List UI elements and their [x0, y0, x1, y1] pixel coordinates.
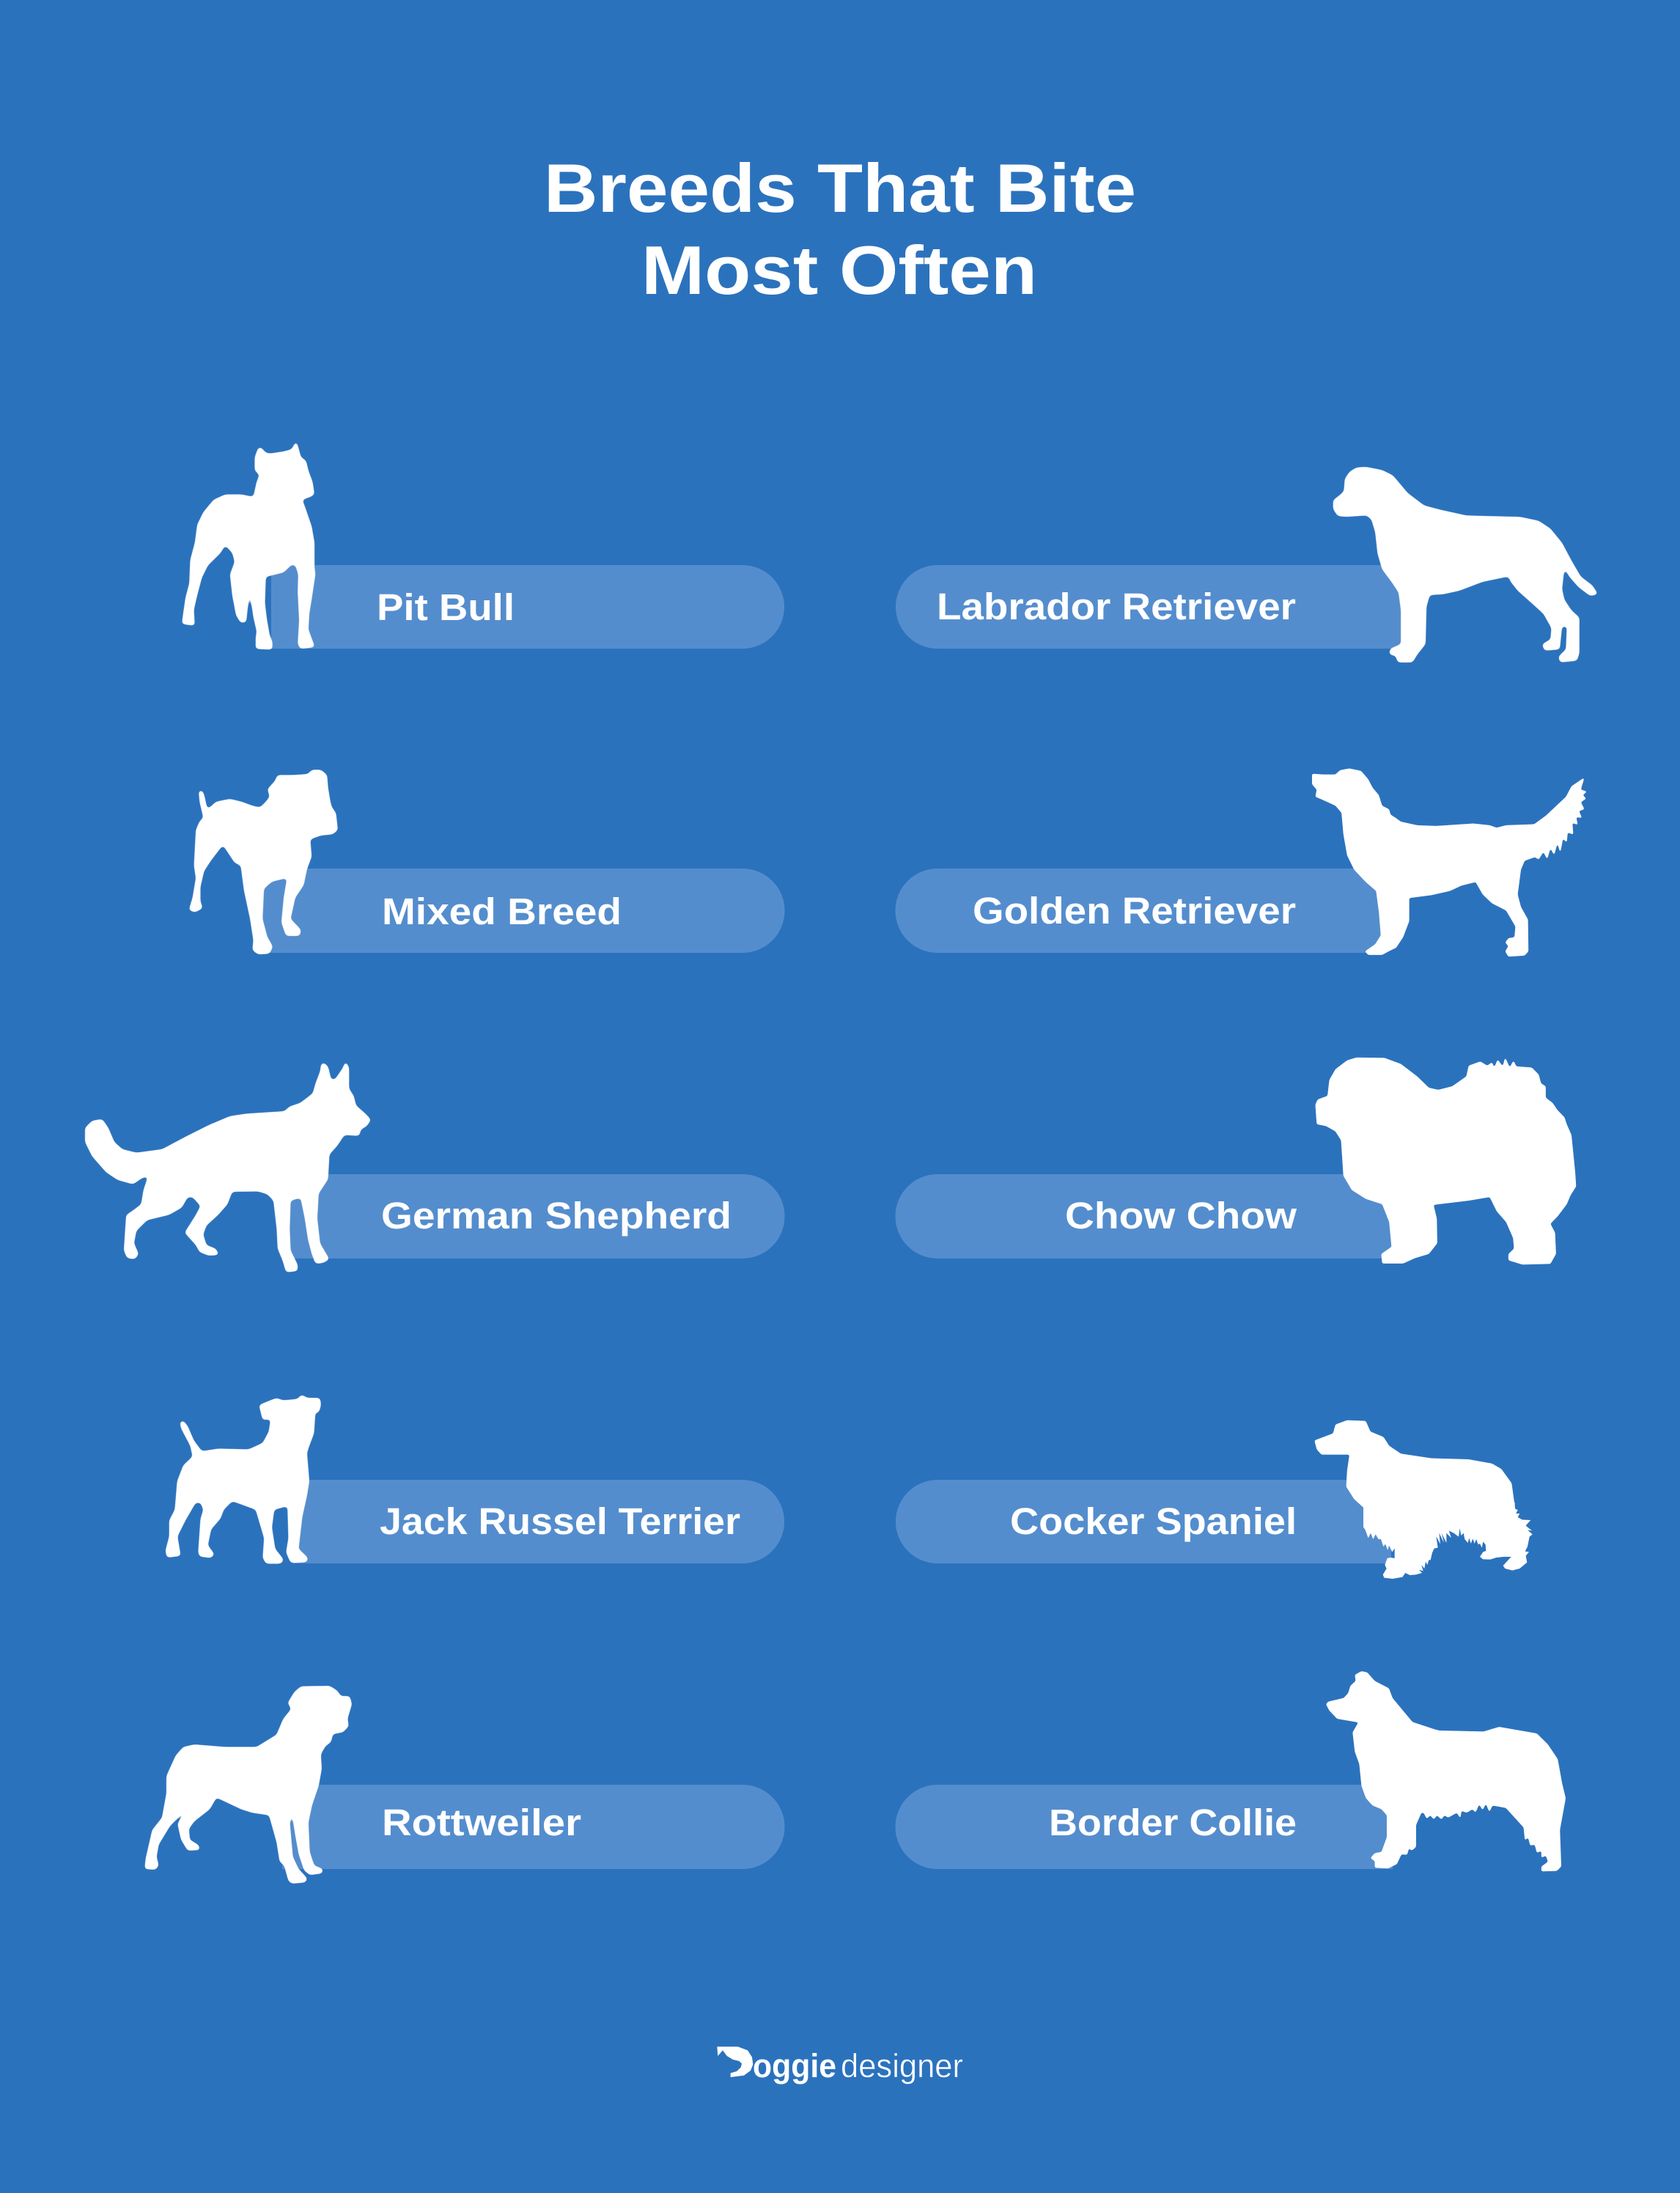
icon: logo dog-head D: [717, 2046, 753, 2077]
icon: german shepherd silhouette: [85, 1061, 371, 1272]
panel: Golden Retriever: [895, 768, 1588, 957]
label: Golden Retriever: Golden Retriever: [973, 890, 1296, 932]
icon: jack russel terrier silhouette: [166, 1394, 321, 1563]
label: Cocker Spaniel: Cocker Spaniel: [1010, 1500, 1297, 1542]
label: Border Collie: Border Collie: [1049, 1802, 1297, 1843]
icon: chow chow silhouette: [1315, 1057, 1576, 1264]
label: Jack Russel Terrier: Jack Russel Terrier: [380, 1500, 740, 1542]
label: Chow Chow: Chow Chow: [1065, 1195, 1297, 1236]
label: German Shepherd: German Shepherd: [381, 1195, 732, 1236]
panel: Border Collie: [895, 1671, 1566, 1871]
logo: Doggie Designer: [717, 2046, 963, 2085]
logo wordmark bold: oggie: [753, 2047, 836, 2085]
title: Breeds That Bite: [544, 150, 1136, 226]
title: Most Often: [641, 232, 1037, 309]
panel: Cocker Spaniel: [896, 1420, 1533, 1579]
panel: Jack Russel Terrier: [166, 1394, 784, 1563]
icon: golden retriever silhouette: [1312, 768, 1588, 957]
icon: mixed breed silhouette: [189, 770, 338, 954]
icon: border collie silhouette: [1326, 1671, 1566, 1871]
panel: Mixed Breed: [189, 770, 784, 954]
label: Mixed Breed: Mixed Breed: [382, 891, 622, 932]
label: Pit Bull: Pit Bull: [377, 586, 515, 628]
panel: Rottweiler: [144, 1686, 784, 1884]
panel: Pit Bull: [182, 440, 784, 649]
panel: Chow Chow: [895, 1057, 1576, 1264]
label: Labrador Retriever: Labrador Retriever: [937, 586, 1296, 627]
panel: German Shepherd: [85, 1061, 784, 1272]
panel: Labrador Retriever: [896, 467, 1598, 663]
label: Rottweiler: Rottweiler: [382, 1802, 581, 1843]
icon: labrador retriever silhouette: [1333, 467, 1598, 663]
icon: rottweiler silhouette: [144, 1686, 352, 1884]
title: [544, 150, 1136, 309]
icon: pit bull silhouette: [182, 440, 315, 649]
logo wordmark light: designer: [841, 2047, 963, 2085]
icon: cocker spaniel silhouette: [1314, 1420, 1533, 1579]
